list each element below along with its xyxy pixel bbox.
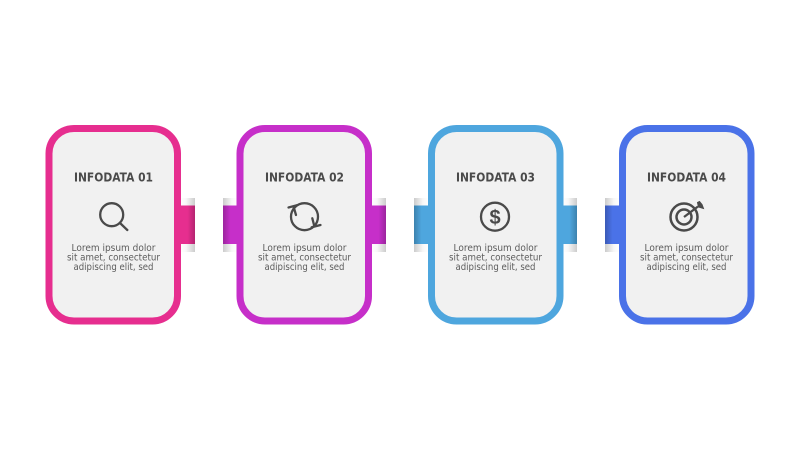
text block: description 02 <box>258 243 351 273</box>
text block: description 01 <box>67 243 160 273</box>
heading: infodata 01: INFODATA 01 <box>74 170 153 184</box>
text block: description 03 <box>449 243 542 273</box>
text block: description 03: adipiscing elit, sed <box>456 262 536 273</box>
text block: description 04: sit amet, consectetur <box>640 252 733 264</box>
icon: dollar coin <box>481 203 509 231</box>
connector: card 3 to card 4, left tab <box>605 198 620 252</box>
panel: infodata 02 <box>240 128 368 321</box>
text block: description 02: Lorem ipsum dolor <box>262 243 347 254</box>
text block: description 01: adipiscing elit, sed <box>74 262 154 273</box>
panel: infodata 03 <box>432 128 560 321</box>
heading: infodata 03: INFODATA 03 <box>456 170 535 184</box>
icon: magnifying glass <box>100 203 127 230</box>
connector: card 1 to card 2, right tab <box>180 198 195 252</box>
panel: infodata 04 <box>622 128 751 321</box>
text block: description 04: adipiscing elit, sed <box>646 262 726 273</box>
text block: description 04 <box>640 243 733 273</box>
heading: infodata 02: INFODATA 02 <box>265 170 344 184</box>
text block: description 03: sit amet, consectetur <box>449 252 542 264</box>
connector: card 3 to card 4, right tab <box>562 198 577 252</box>
connector: card 2 to card 3, right tab <box>371 198 386 252</box>
icon: refresh arrows <box>288 203 320 230</box>
heading: infodata 04: INFODATA 04 <box>647 170 726 184</box>
text block: description 02: adipiscing elit, sed <box>264 262 344 273</box>
connector: card 2 to card 3, left tab <box>414 198 429 252</box>
connector: card 1 to card 2, left tab <box>223 198 238 252</box>
text block: description 01: sit amet, consectetur <box>67 252 160 264</box>
icon: dollar coin: $ <box>489 207 501 229</box>
icon: target with arrow <box>670 202 704 230</box>
text block: description 04: Lorem ipsum dolor <box>644 243 729 254</box>
text block: description 01: Lorem ipsum dolor <box>72 243 156 254</box>
text block: description 02: sit amet, consectetur <box>258 252 351 264</box>
text block: description 03: Lorem ipsum dolor <box>454 243 538 254</box>
panel: infodata 01 <box>49 128 178 321</box>
